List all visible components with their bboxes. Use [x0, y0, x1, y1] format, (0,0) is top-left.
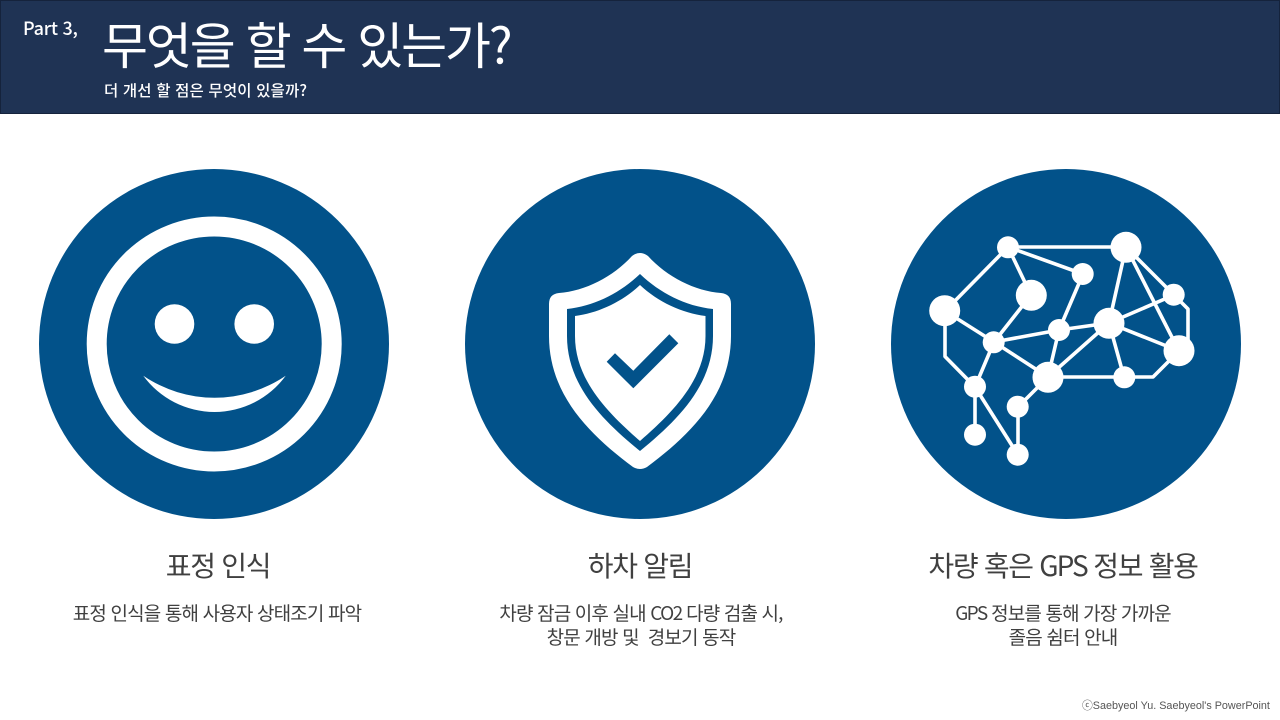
- text: GPS description: GPS 정보를 통해 가장 가까운: [955, 599, 1171, 626]
- header banner: [0, 0, 1280, 114]
- text: facial recognition description: 표정 인식을 통해 사용자 상태조기 파악: [73, 599, 361, 626]
- heading: facial recognition: 표정 인식: [166, 545, 270, 585]
- main title: 무엇을 할 수 있는가?: [102, 7, 511, 79]
- part label: Part 3,: [23, 15, 78, 41]
- icon: shield with check in circle: [465, 169, 815, 519]
- text: defect alert description: 차량 잠금 이후 실내 CO2 다량 검출 시,: [499, 599, 783, 626]
- heading: defect alert: 하차 알림: [588, 545, 692, 585]
- subtitle: 더 개선 할 점은 무엇이 있을까?: [104, 79, 307, 101]
- text: defect alert description: [499, 599, 783, 650]
- text: GPS description: [955, 599, 1171, 650]
- icon: smiley in circle: [39, 169, 389, 519]
- heading: vehicle or GPS info: 차량 혹은 GPS 정보 활용: [928, 545, 1198, 585]
- copyright: ⓒSaebyeol Yu. Saebyeol's PowerPoint: [1082, 700, 1270, 712]
- text: defect alert description: 창문 개방 및 경보기 동작: [547, 623, 735, 650]
- icon: neural network brain in circle: [891, 169, 1241, 519]
- text: GPS description: 졸음 쉼터 안내: [1009, 623, 1117, 650]
